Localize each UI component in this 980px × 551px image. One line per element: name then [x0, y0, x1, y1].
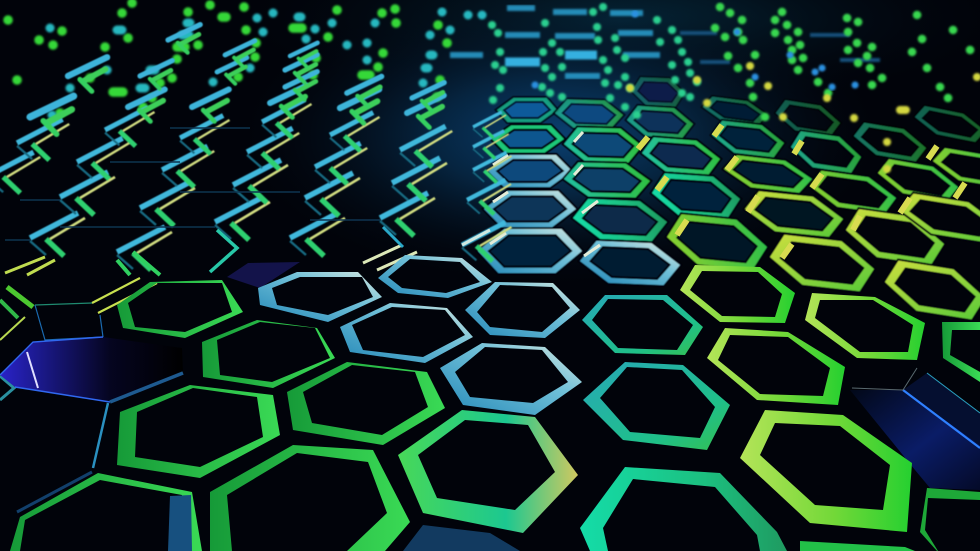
- hexagon: blue-teal mid: [258, 272, 382, 322]
- hexagon: blue upper centre: [378, 255, 492, 298]
- left edge hexagon fragments: [0, 278, 157, 400]
- bokeh dots: small blue accents: [535, 14, 855, 87]
- hexagon: green mid-left: [202, 320, 335, 388]
- dark blue tile at bottom centre: [403, 525, 520, 551]
- zigzag column G: [462, 112, 512, 261]
- hexagon: lime upper right: [680, 265, 795, 323]
- hexagon: teal right of centre: [582, 295, 703, 355]
- zigzag column F: [380, 83, 452, 236]
- hexagon: green-to-mint front centre: [398, 410, 578, 533]
- hexagon: blue front centre: [340, 303, 473, 363]
- hexagon: green centre-left: [287, 362, 445, 445]
- bokeh dots: green: [8, 3, 447, 113]
- hexagon: right edge partial: [942, 322, 980, 382]
- hexagon: lower right partial: [920, 488, 980, 551]
- zigzag column B: [30, 25, 200, 256]
- blue glowing tile, left: [0, 337, 183, 402]
- hexagon: large lime front right: [740, 410, 912, 532]
- hexagon: yellow-lime right: [805, 293, 925, 360]
- hexagon: green upper-left: [117, 280, 243, 338]
- left field: stepped zigzag edges: [0, 25, 512, 275]
- extra lower-left edges: [5, 257, 55, 275]
- hexagon: white-blue centre: [465, 282, 580, 338]
- interior blue of distant hexagons: [482, 80, 843, 281]
- hexagon: green left: [117, 385, 280, 478]
- mid-field hexagons: [475, 77, 980, 323]
- hexagon rows, centre to right: [494, 98, 560, 122]
- navy hexagon tile: [227, 262, 300, 288]
- zigzag column A: [0, 57, 107, 193]
- white hex corner highlights: [490, 132, 600, 256]
- zigzag column C: [117, 41, 255, 270]
- hexagon: bottom edge sliver: [800, 541, 915, 551]
- hexagon: large green bottom left-centre: [210, 445, 410, 551]
- foreground large hexagons: [10, 255, 980, 551]
- top centre: blurred horizontal blue bars: [450, 8, 880, 76]
- zigzag column E: [290, 76, 382, 256]
- blue panel beside bottom-left hexagon: [168, 495, 192, 551]
- hexagon: teal centre right: [583, 362, 730, 450]
- hexagon: green bottom left: [10, 473, 202, 551]
- hexagon: lime right middle: [707, 328, 845, 405]
- blue edge lower left: [17, 472, 92, 512]
- hexagon: pale blue centre: [440, 343, 582, 415]
- hexagon: mint bottom centre: [580, 467, 787, 551]
- zigzag column D: [215, 43, 318, 240]
- bokeh dots: teal and blue: [50, 12, 482, 115]
- blue edges around lower-left black tile: [93, 403, 108, 468]
- blue glowing tile, right: [850, 368, 980, 490]
- yellow hex corner highlights: [638, 125, 965, 258]
- bokeh dots: yellow accents: [630, 66, 977, 169]
- bokeh dots: right side columns: [492, 7, 697, 115]
